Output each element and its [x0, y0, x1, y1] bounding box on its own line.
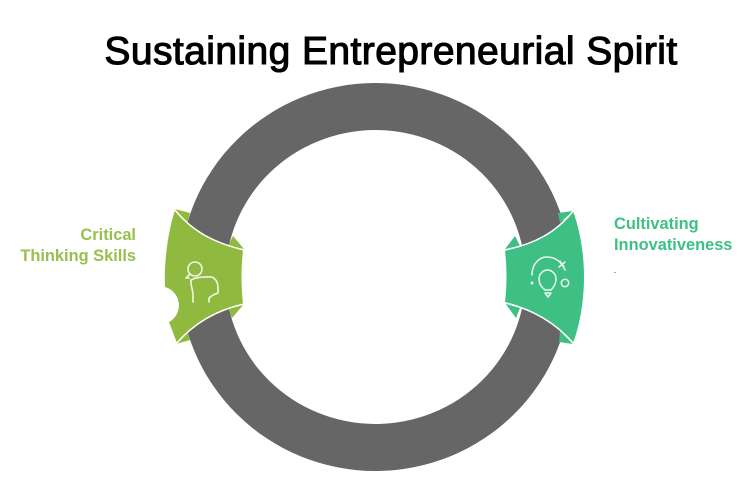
- label: cultivating innovativeness: [614, 215, 732, 254]
- label: cultivating innovativeness: Innovativeness: [614, 236, 732, 254]
- title: Sustaining Entrepreneurial Spirit: [104, 30, 678, 73]
- small speck: [614, 272, 616, 273]
- icon: head with magnifier: [186, 262, 218, 302]
- label: critical thinking skills: [20, 226, 136, 265]
- panel: critical thinking segment: [165, 209, 244, 344]
- icon: light bulb: [531, 257, 569, 297]
- label: cultivating innovativeness: Cultivating: [614, 215, 699, 233]
- grey ring: [180, 83, 572, 471]
- label: critical thinking skills: Thinking Skills: [20, 247, 136, 265]
- panel: innovativeness segment: [505, 210, 584, 344]
- white edge lines: [505, 210, 574, 344]
- white edge lines: [175, 210, 244, 344]
- label: critical thinking skills: Critical: [80, 226, 136, 244]
